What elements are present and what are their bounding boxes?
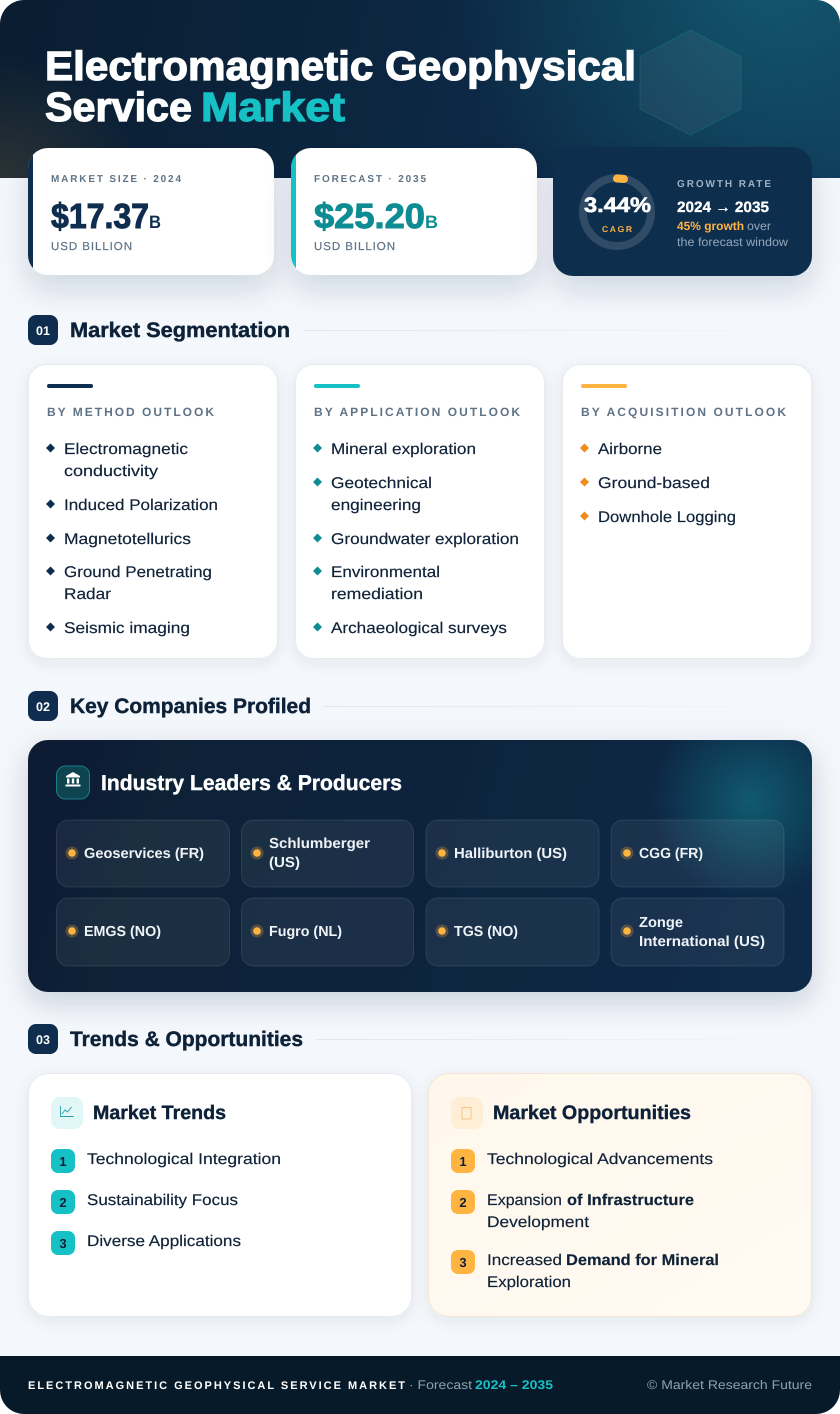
trend list: 1 xyxy=(59,1154,67,1169)
section heading 02: Key Companies Profiled xyxy=(70,695,311,718)
stat card: forecast xyxy=(291,148,537,275)
header band xyxy=(0,0,840,178)
chip dots xyxy=(66,846,634,938)
panel: application outlook: remediation xyxy=(331,586,423,603)
panel: method outlook: Radar xyxy=(64,586,111,603)
footer: ELECTROMAGNETIC GEOPHYSICAL SERVICE MARKET xyxy=(28,1380,405,1392)
panel: acquisition outlook: Airborne xyxy=(598,441,662,458)
chip labels: Geoservices (FR) xyxy=(84,846,204,862)
stat card: forecast: USD BILLION xyxy=(314,241,395,253)
opportunity list: Exploration xyxy=(487,1274,571,1291)
panel: application outlook: Geotechnical xyxy=(331,475,432,492)
title: Service xyxy=(45,84,192,130)
chip labels: International (US) xyxy=(639,934,765,950)
icon: bank xyxy=(56,766,90,799)
panel: market trends: Market Trends xyxy=(93,1102,226,1124)
panel: acquisition outlook: BY ACQUISITION OUTLOOK xyxy=(581,405,786,419)
stat card: market size: USD BILLION xyxy=(51,241,132,253)
chip labels xyxy=(84,836,765,950)
stat card: market size: MARKET SIZE · 2024 xyxy=(51,174,181,185)
footer: 2024 – 2035 xyxy=(475,1378,553,1392)
title: Electromagnetic Geophysical xyxy=(45,43,636,89)
section heading 01 xyxy=(28,315,812,345)
panel: market trends xyxy=(28,1074,412,1316)
trend list: Diverse Applications xyxy=(87,1233,241,1250)
panel: method outlook: Electromagnetic xyxy=(64,441,188,458)
section heading 02 xyxy=(28,691,812,721)
opportunity list xyxy=(451,1149,719,1291)
CAGR ring: CAGR xyxy=(602,224,632,234)
trend list: Sustainability Focus xyxy=(87,1192,238,1209)
panel: application outlook: engineering xyxy=(331,497,421,514)
panel: method outlook: Seismic imaging xyxy=(64,620,190,637)
trend list: 3 xyxy=(59,1236,67,1251)
section heading 02: 02 xyxy=(36,700,50,714)
growth rate text xyxy=(677,179,788,249)
opportunity list: Expansion xyxy=(487,1192,562,1209)
opportunity list: 2 xyxy=(459,1195,467,1210)
CAGR ring: 3.44% xyxy=(584,194,651,217)
chip labels: Halliburton (US) xyxy=(454,846,567,862)
trend list: 2 xyxy=(59,1195,67,1210)
opportunity list: Development xyxy=(487,1214,590,1231)
panel: method outlook: BY METHOD OUTLOOK xyxy=(47,405,214,419)
stat card: market size xyxy=(28,148,274,275)
panel: application outlook: Groundwater exploration xyxy=(331,531,519,548)
growth rate text: 45% growth xyxy=(677,219,744,233)
section heading 01: 01 xyxy=(36,324,50,338)
trend list: Technological Integration xyxy=(87,1151,281,1168)
chip labels: (US) xyxy=(269,855,300,871)
opportunity list: Increased xyxy=(487,1252,562,1269)
footer: © Market Research Future xyxy=(647,1378,812,1392)
growth rate text: over xyxy=(747,219,771,233)
section heading 03: 03 xyxy=(36,1033,50,1047)
panel: acquisition outlook xyxy=(562,364,812,658)
title xyxy=(45,43,636,130)
footer: · Forecast xyxy=(409,1378,473,1392)
panel: method outlook: Magnetotellurics xyxy=(64,531,191,548)
chip labels: Schlumberger xyxy=(269,836,370,852)
panel: application outlook: Mineral exploration xyxy=(331,441,476,458)
chip labels: CGG (FR) xyxy=(639,846,703,862)
stat card: forecast: FORECAST · 2035 xyxy=(314,174,426,185)
opportunity list: Technological Advancements xyxy=(487,1151,713,1168)
chip labels: Zonge xyxy=(639,915,683,931)
decorative hexagon xyxy=(640,30,741,135)
panel: application outlook xyxy=(296,364,544,658)
growth rate text: 2024 → 2035 xyxy=(677,199,769,216)
company chips xyxy=(56,820,784,966)
panel: market opportunities: Market Opportunities xyxy=(493,1102,691,1124)
panel: method outlook xyxy=(28,364,278,658)
footer xyxy=(0,1356,840,1414)
panel: acquisition outlook: Downhole Logging xyxy=(598,509,736,526)
stat card: market size: $17.37 xyxy=(51,197,149,236)
panel: acquisition outlook: Ground-based xyxy=(598,475,710,492)
panel: application outlook: BY APPLICATION OUTLOOK xyxy=(314,405,520,419)
growth rate text: GROWTH RATE xyxy=(677,179,771,190)
panel: method outlook: Induced Polarization xyxy=(64,497,218,514)
opportunity list: 1 xyxy=(459,1154,467,1169)
title: Market xyxy=(201,84,345,130)
chip labels: EMGS (NO) xyxy=(84,924,161,940)
stat card: forecast: $25.20 xyxy=(314,197,425,236)
chip labels: TGS (NO) xyxy=(454,924,518,940)
panel: application outlook: Environmental xyxy=(331,564,440,581)
section heading 03: Trends & Opportunities xyxy=(70,1028,303,1051)
panel: method outlook: Ground Penetrating xyxy=(64,564,212,581)
opportunity list: Demand for Mineral xyxy=(566,1252,719,1269)
stat card: market size: B xyxy=(149,212,161,232)
CAGR ring xyxy=(583,178,651,246)
panel: key companies xyxy=(28,740,812,992)
icon: placeholder glyph xyxy=(451,1097,483,1129)
opportunity list: of Infrastructure xyxy=(567,1192,694,1209)
opportunity list: 3 xyxy=(459,1255,467,1270)
trend list xyxy=(51,1149,281,1255)
stat card: forecast: B xyxy=(425,212,438,232)
panel: application outlook: Archaeological surveys xyxy=(331,620,507,637)
stat card: CAGR xyxy=(553,147,812,276)
section heading 03 xyxy=(28,1024,812,1054)
chip labels: Fugro (NL) xyxy=(269,924,342,940)
panel: key companies: Industry Leaders & Producers xyxy=(101,771,402,795)
icon: line chart xyxy=(51,1097,83,1129)
section heading 01: Market Segmentation xyxy=(70,319,290,342)
growth rate text: the forecast window xyxy=(677,235,788,249)
panel: method outlook: conductivity xyxy=(64,463,158,480)
panel: market opportunities xyxy=(428,1074,812,1316)
